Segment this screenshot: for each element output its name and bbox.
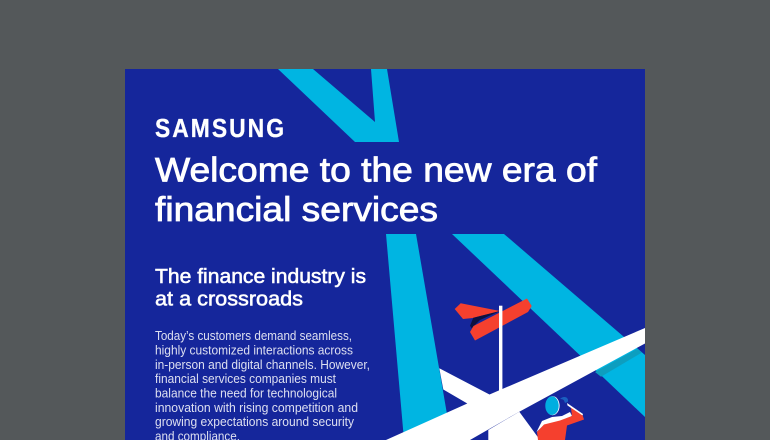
illustration: crossroads scene	[386, 234, 645, 440]
title: financial services	[155, 191, 438, 229]
left cyan band	[386, 234, 448, 440]
hand	[560, 397, 568, 403]
teal road shadow	[595, 349, 642, 377]
person looking at sign	[536, 396, 584, 440]
logo: SAMSUNG wordmark: SAMSUNG	[155, 115, 286, 143]
subheading: The finance industry is	[155, 265, 366, 288]
subheading: at a crossroads	[155, 288, 303, 310]
body paragraph: highly customized interactions across	[155, 344, 353, 358]
left sign arm	[455, 303, 500, 319]
body paragraph: innovation with rising competition and	[155, 401, 358, 415]
body paragraph: balance the need for technological	[155, 386, 337, 400]
white crossing road	[386, 328, 645, 440]
head highlight	[546, 396, 560, 415]
white arm highlight	[567, 403, 583, 416]
body paragraph: growing expectations around security	[155, 415, 355, 429]
panel: blue document cover	[125, 69, 645, 440]
body paragraph	[155, 329, 370, 440]
signpost pole	[499, 306, 502, 391]
right cyan band	[452, 234, 645, 417]
subheading	[155, 265, 366, 310]
head	[545, 396, 559, 415]
illustration: top cyan arrow shape	[278, 69, 399, 142]
title	[155, 152, 598, 229]
body paragraph: Today’s customers demand seamless,	[155, 329, 352, 343]
title: Welcome to the new era of	[155, 152, 598, 190]
white road going down	[488, 412, 540, 440]
sign shadow	[470, 311, 500, 328]
body paragraph: in-person and digital channels. However,	[155, 358, 370, 372]
body paragraph: financial services companies must	[155, 372, 336, 386]
right sign arm	[470, 298, 532, 340]
red torso and raised arm	[537, 405, 584, 440]
white shoulder highlight	[536, 412, 572, 432]
